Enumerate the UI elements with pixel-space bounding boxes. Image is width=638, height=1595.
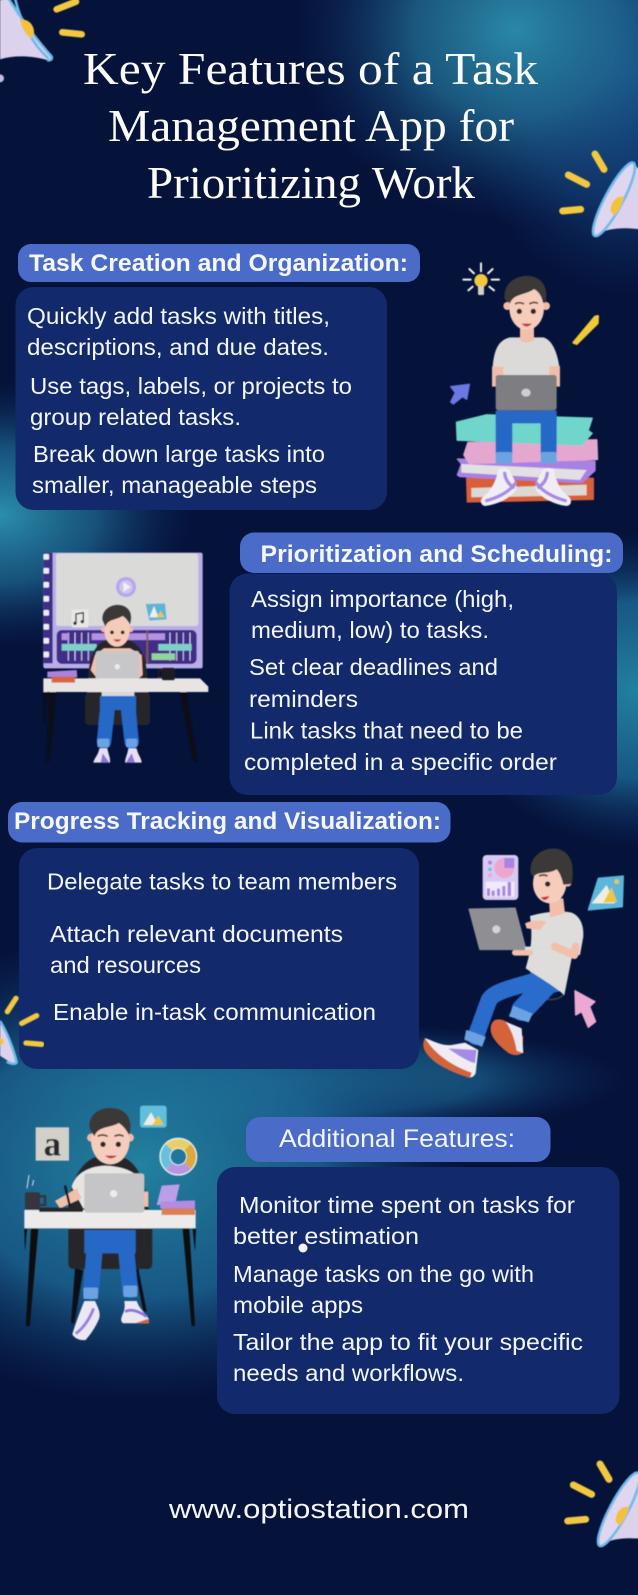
icon: megaphone bottom right xyxy=(568,1464,638,1550)
heading: additional features xyxy=(246,1117,550,1162)
icon: arrow xyxy=(575,991,596,1027)
title xyxy=(83,43,538,208)
text block: prioritization: reminders xyxy=(249,686,358,712)
text block: task creation: Use tags, labels, or projects to xyxy=(30,373,352,399)
icon: arrow xyxy=(451,384,469,404)
text block: progress tracking: and resources xyxy=(50,952,201,978)
text block: task creation: smaller, manageable steps xyxy=(32,472,317,498)
text block: additional features: Tailor the app to fit your specific xyxy=(233,1329,583,1355)
website url: www.optiostation.com xyxy=(168,1494,469,1524)
person xyxy=(481,276,571,506)
text block: task creation: Quickly add tasks with titles, xyxy=(27,303,330,329)
illustration: person at video editing desk xyxy=(43,553,208,763)
text block: additional features: Monitor time spent on tasks for xyxy=(239,1192,575,1218)
heading: prioritization: Prioritization and Scheduling: xyxy=(260,541,612,568)
shoes xyxy=(424,1038,478,1077)
text block: prioritization xyxy=(230,574,617,795)
chair xyxy=(68,1154,152,1269)
icon: donut chart xyxy=(165,1143,192,1170)
icon: megaphone top left xyxy=(0,0,82,82)
heading: progress tracking: Progress Tracking and Visualization: xyxy=(14,808,441,835)
panel: prioritization and scheduling xyxy=(230,532,623,795)
heading: prioritization xyxy=(240,532,623,573)
heading: task creation xyxy=(18,244,420,282)
panel: task creation xyxy=(16,244,420,510)
text block: additional features: needs and workflows. xyxy=(233,1360,464,1386)
text block: additional features xyxy=(217,1167,620,1414)
icon: chart card xyxy=(483,855,518,900)
icon: lightbulb xyxy=(463,263,499,295)
heading: progress tracking xyxy=(8,802,450,842)
text block: task creation: Break down large tasks into xyxy=(33,441,325,467)
person xyxy=(423,848,583,1078)
text block: prioritization: medium, low) to tasks. xyxy=(251,617,489,643)
text block: additional features: mobile apps xyxy=(233,1292,363,1318)
icon: image card xyxy=(588,876,623,910)
desk xyxy=(43,668,208,762)
text block: additional features: better estimation xyxy=(233,1223,419,1249)
panel: progress tracking xyxy=(8,802,450,1069)
icon: megaphone top right xyxy=(563,154,638,240)
text block: progress tracking: Enable in-task communication xyxy=(53,999,376,1025)
text block: task creation: descriptions, and due dates. xyxy=(27,334,329,360)
video board xyxy=(43,553,203,668)
heading: additional features: Additional Features: xyxy=(279,1125,515,1153)
illustration: person floating with laptop xyxy=(423,848,623,1078)
icon: letter card: a xyxy=(44,1125,61,1164)
text block: prioritization: completed in a specific order xyxy=(244,749,557,775)
desk xyxy=(24,1173,196,1326)
title: Management App for xyxy=(108,100,514,151)
text block: progress tracking: Delegate tasks to team members xyxy=(47,868,397,894)
illustration: person on books xyxy=(451,263,598,506)
title: Prioritizing Work xyxy=(147,157,475,208)
text block: additional features: Manage tasks on the go with xyxy=(233,1261,534,1287)
person upper xyxy=(91,605,143,682)
icon: letter card xyxy=(36,1125,69,1164)
text block: prioritization: Assign importance (high, xyxy=(251,586,514,612)
text block: task creation xyxy=(16,287,387,510)
heading: task creation: Task Creation and Organization: xyxy=(29,250,408,277)
text block: progress tracking: Attach relevant documents xyxy=(50,921,343,947)
panel: additional features xyxy=(217,1117,620,1414)
illustration: person at design desk xyxy=(24,1106,196,1340)
person legs xyxy=(93,692,142,763)
icon: pencil xyxy=(573,316,598,344)
books xyxy=(457,415,597,502)
text block: task creation: group related tasks. xyxy=(30,404,241,430)
text block: prioritization: Link tasks that need to be xyxy=(250,718,523,744)
person xyxy=(55,1108,149,1340)
title: Key Features of a Task xyxy=(83,43,538,94)
text block: progress tracking xyxy=(19,848,419,1069)
text block: prioritization: Set clear deadlines and xyxy=(249,654,498,680)
icon: megaphone left xyxy=(0,998,42,1064)
chair xyxy=(85,638,150,725)
icon: image card xyxy=(140,1106,167,1128)
